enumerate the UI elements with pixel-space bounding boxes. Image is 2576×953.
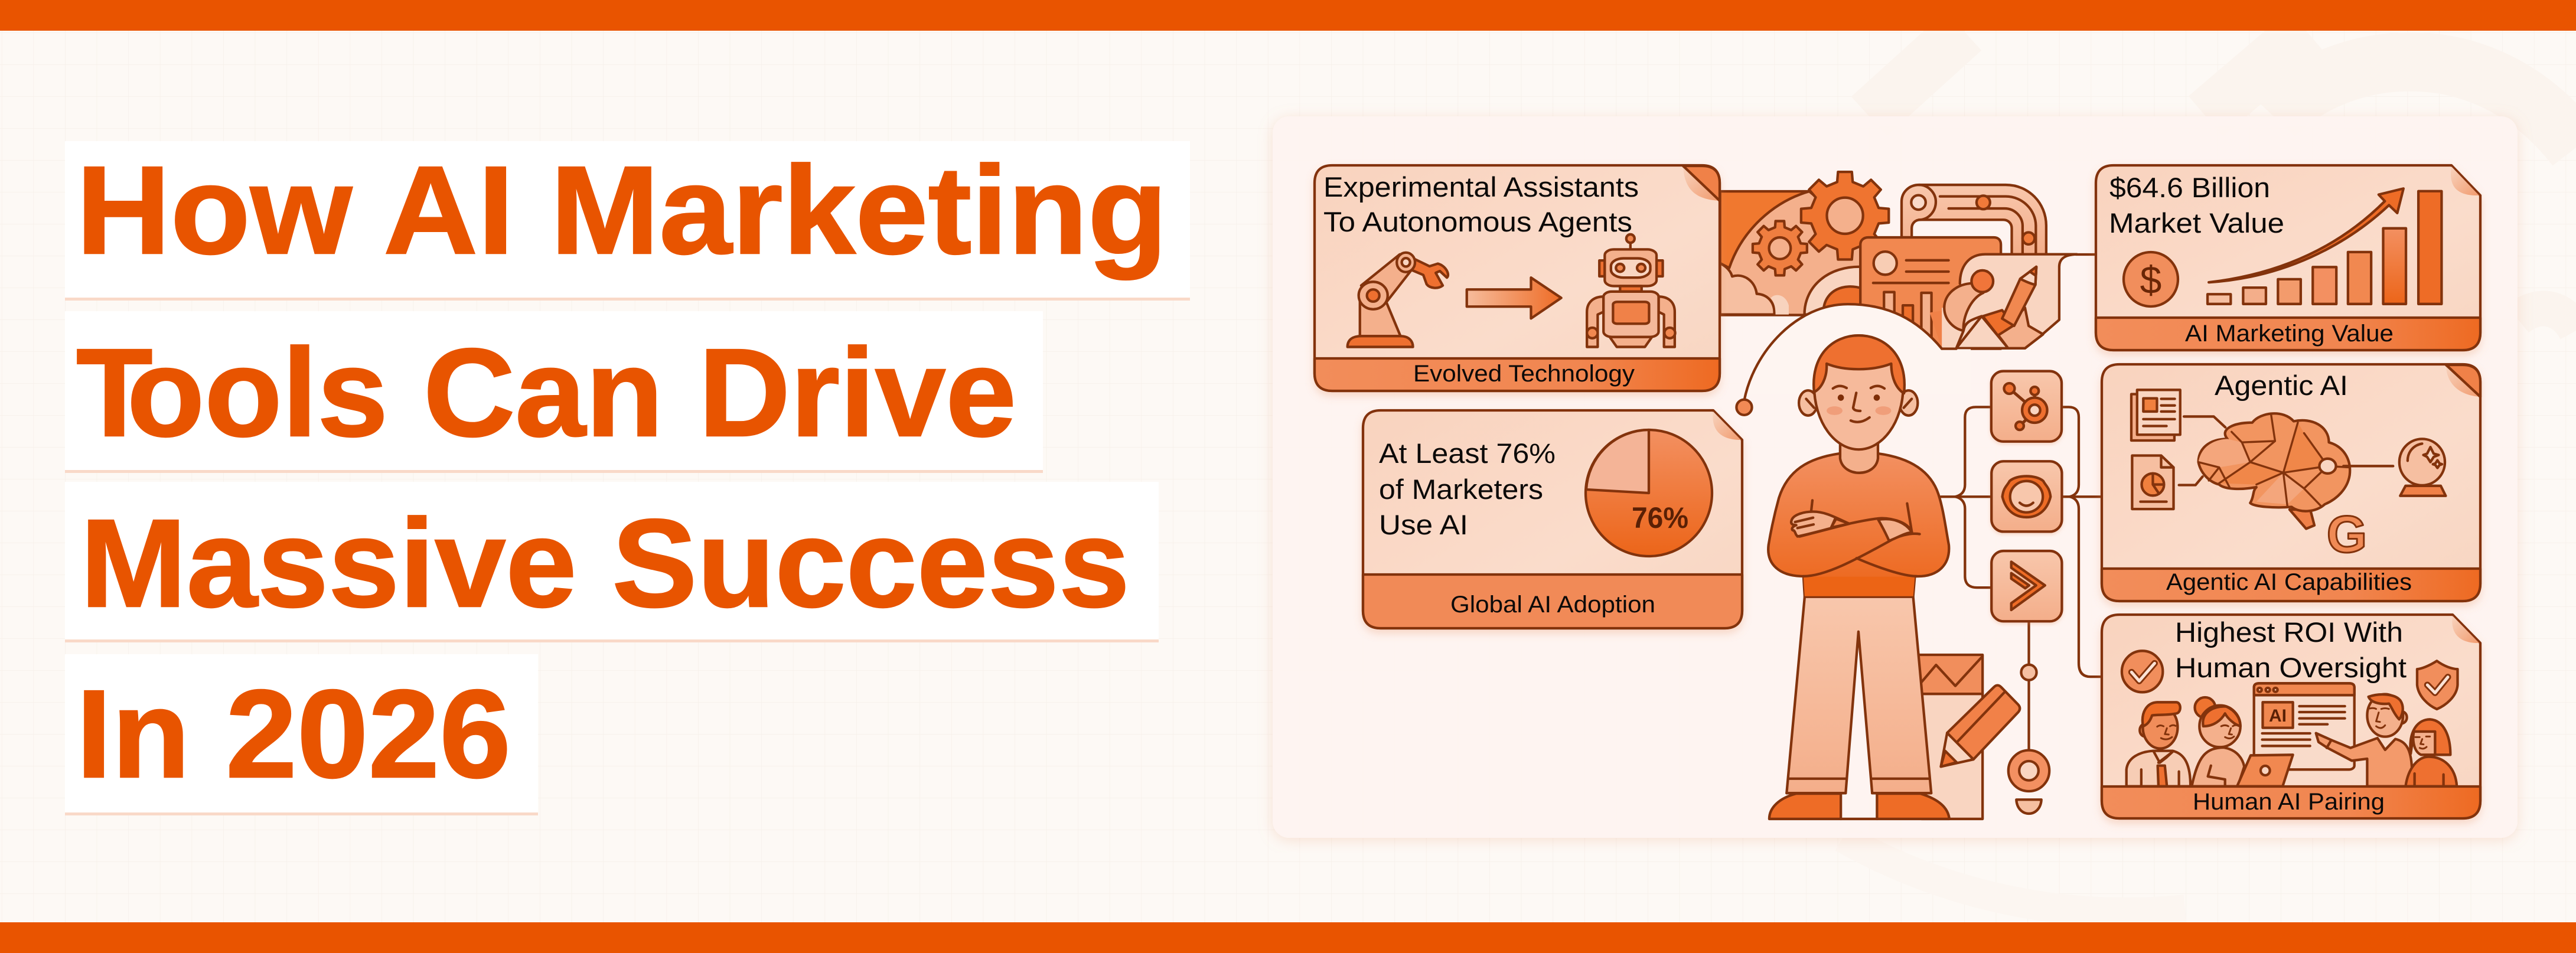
panel background [1273, 116, 2518, 838]
card: evolved technology [1315, 165, 1720, 391]
cloud [1720, 263, 1775, 315]
card footer label: Agentic AI Capabilities [2166, 569, 2412, 595]
connector to market value card [2076, 253, 2096, 256]
illustration: window with AI [2254, 683, 2355, 769]
icon: robotic arm [1348, 253, 1448, 347]
card: agentic AI [2102, 364, 2480, 601]
illustration: presenter [2316, 694, 2412, 786]
title line 4: In 2026 [76, 664, 511, 804]
card body [2102, 615, 2480, 818]
icon tile: HubSpot [1991, 371, 2062, 442]
sweater [1768, 453, 1949, 597]
growth arrow [2209, 188, 2404, 282]
card fold [1713, 412, 1741, 440]
dome [1720, 191, 1865, 315]
card footer band [2102, 569, 2480, 601]
icon: crystal ball [2399, 439, 2445, 496]
illustration: girl [2405, 719, 2457, 786]
card heading line 2: Human Oversight [2175, 652, 2407, 683]
card heading: Experimental Assistants [1323, 171, 1639, 203]
card heading: Agentic AI [2215, 370, 2348, 401]
top centre illustration [1720, 172, 2077, 415]
title line 2: T [76, 322, 152, 462]
icon tile: wrapped face logo [1991, 461, 2062, 531]
icon: dollar coin [2124, 252, 2178, 306]
icon: brain stem [2290, 510, 2314, 528]
card fold [1683, 166, 1720, 201]
card footer label: Global AI Adoption [1450, 592, 1655, 618]
card heading: At Least 76% [1379, 438, 1556, 469]
card footer band [1363, 575, 1742, 628]
pie chart: 76% [1632, 501, 1688, 534]
card fold [2451, 167, 2479, 195]
title line 3: Massive Success [80, 493, 1130, 633]
card: market value [2096, 165, 2480, 350]
icon: check badge [2122, 651, 2163, 692]
large gear [1801, 172, 1889, 260]
card heading: $64.6 Billion [2109, 172, 2270, 203]
arch ring [1805, 267, 1862, 315]
card body [1315, 165, 1720, 391]
title [65, 140, 1190, 815]
small gear [1753, 221, 1807, 275]
card footer label: Human AI Pairing [2193, 789, 2385, 815]
card heading: Highest ROI With [2175, 616, 2403, 648]
card heading line 2: Market Value [2109, 207, 2284, 239]
crossed arm lines [1804, 500, 1920, 576]
paper with pencil [1942, 254, 2077, 348]
card fold [2452, 616, 2479, 643]
background watermark swooshes [1843, 31, 2576, 912]
icon: pencil [1941, 686, 2020, 766]
card heading line 3: Use AI [1379, 509, 1468, 540]
panel: illustration [1273, 116, 2518, 838]
icon: report with pie [2132, 455, 2203, 509]
card footer band [2102, 786, 2480, 818]
orange corner block [1720, 191, 1814, 315]
hands [1791, 512, 1849, 537]
top orange bar [0, 0, 2576, 31]
bottom orange bar [0, 922, 2576, 953]
illustration: woman [2192, 697, 2244, 786]
report card with bar chart [1860, 237, 2001, 349]
arrow [1467, 278, 1561, 318]
person [1768, 453, 1949, 819]
card: human AI pairing [2102, 615, 2480, 818]
icon: robot [1587, 234, 1675, 347]
card: global AI adoption [1363, 410, 1742, 628]
pie chart [1586, 430, 1712, 556]
bar chart [2207, 188, 2441, 304]
person head [1799, 335, 1918, 473]
title line 2: ools Can Drive [127, 322, 1016, 462]
envelope and notepad [1918, 655, 2020, 819]
card footer label: AI Marketing Value [2185, 321, 2394, 347]
card footer band [2096, 318, 2480, 350]
icon: document stack [2131, 390, 2225, 440]
arch line with node [1736, 304, 1957, 415]
card body [2102, 364, 2480, 601]
facial features [1827, 386, 1891, 422]
illustration: laptop [2237, 755, 2293, 786]
card body [2096, 165, 2480, 350]
hair [1814, 335, 1905, 393]
scroll conveyor [1902, 185, 2046, 254]
connector network [1941, 407, 2102, 750]
icon: Google G: G [2327, 505, 2367, 563]
card heading line 2: To Autonomous Agents [1323, 206, 1632, 237]
card footer band [1315, 358, 1720, 391]
shoes [1769, 794, 1841, 819]
card footer label: Evolved Technology [1413, 361, 1635, 387]
title line 1: How AI Marketing [76, 140, 1168, 280]
icon tile: chevron logo [1991, 551, 2062, 621]
illustration: man with tie [2127, 702, 2190, 786]
icon: shield [2417, 661, 2457, 709]
face [1814, 335, 1903, 449]
white arch [1742, 304, 1971, 409]
icon: brain network [2199, 413, 2393, 511]
timeline nodes [2008, 665, 2049, 814]
icon: dollar coin: $ [2140, 258, 2161, 302]
trousers [1786, 597, 1931, 793]
card body [1363, 410, 1742, 628]
card heading line 2: of Marketers [1379, 474, 1543, 505]
card fold [2446, 365, 2480, 397]
window AI label: AI [2269, 706, 2287, 726]
